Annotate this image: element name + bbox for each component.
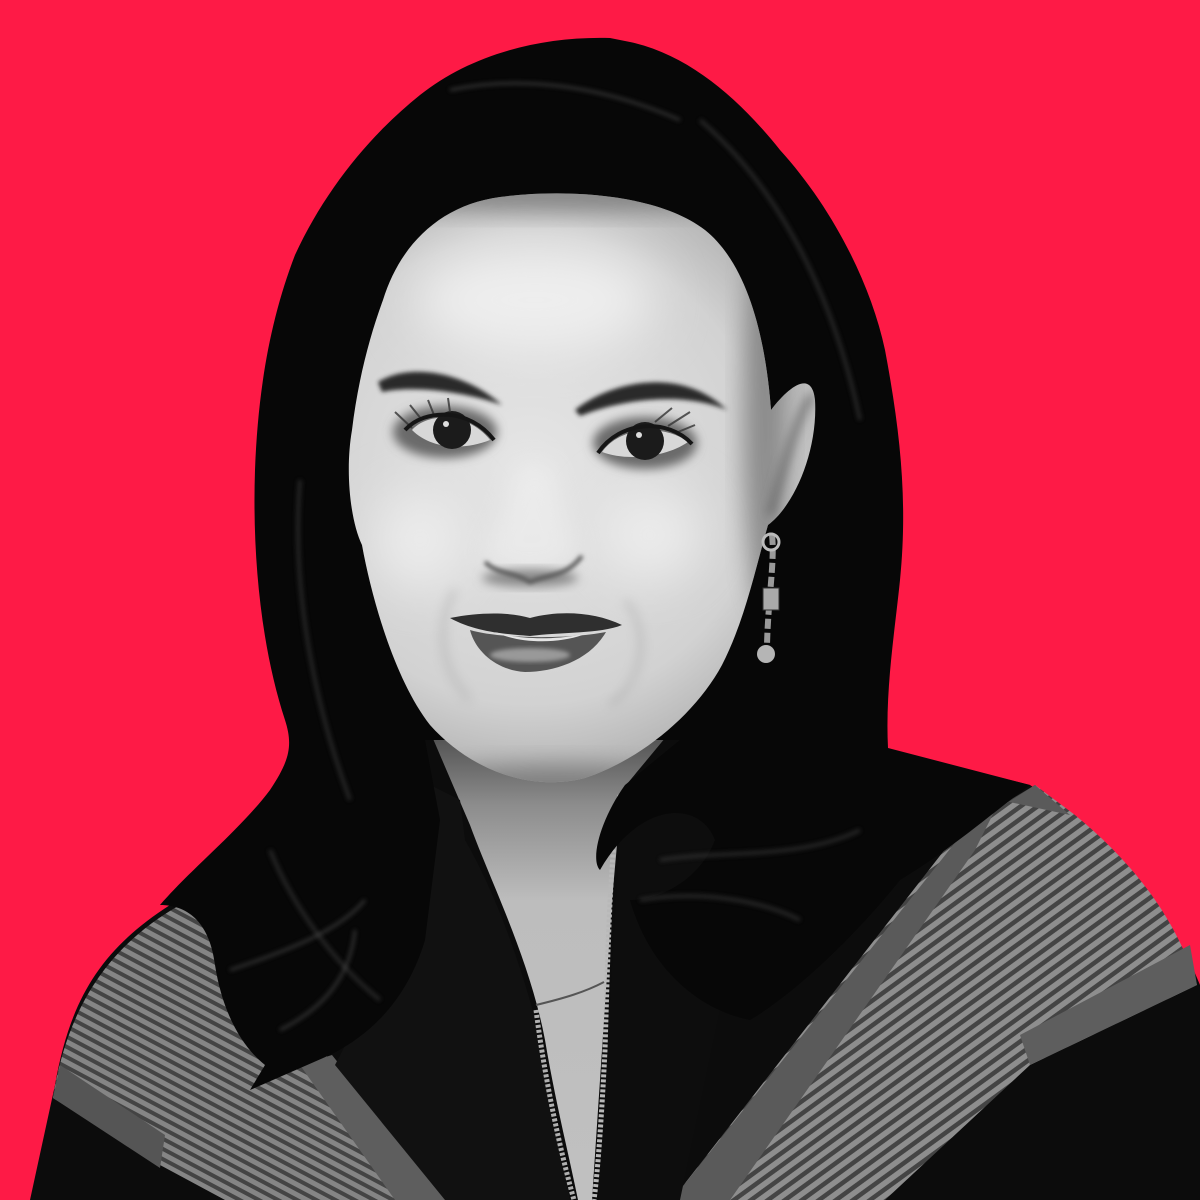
eyebrows <box>378 372 727 416</box>
neck and chest <box>425 700 680 1200</box>
collar <box>335 770 760 1200</box>
left eye <box>393 398 497 458</box>
lips <box>450 613 622 672</box>
nose <box>482 465 582 587</box>
right shoulder striped band <box>672 785 1197 1200</box>
earring <box>757 534 779 663</box>
right eye <box>593 408 697 469</box>
body: black top <box>30 700 1200 1200</box>
zipper <box>536 795 620 1200</box>
left shoulder striped band <box>53 905 447 1200</box>
hair mass <box>160 38 1030 1090</box>
face <box>349 177 815 815</box>
